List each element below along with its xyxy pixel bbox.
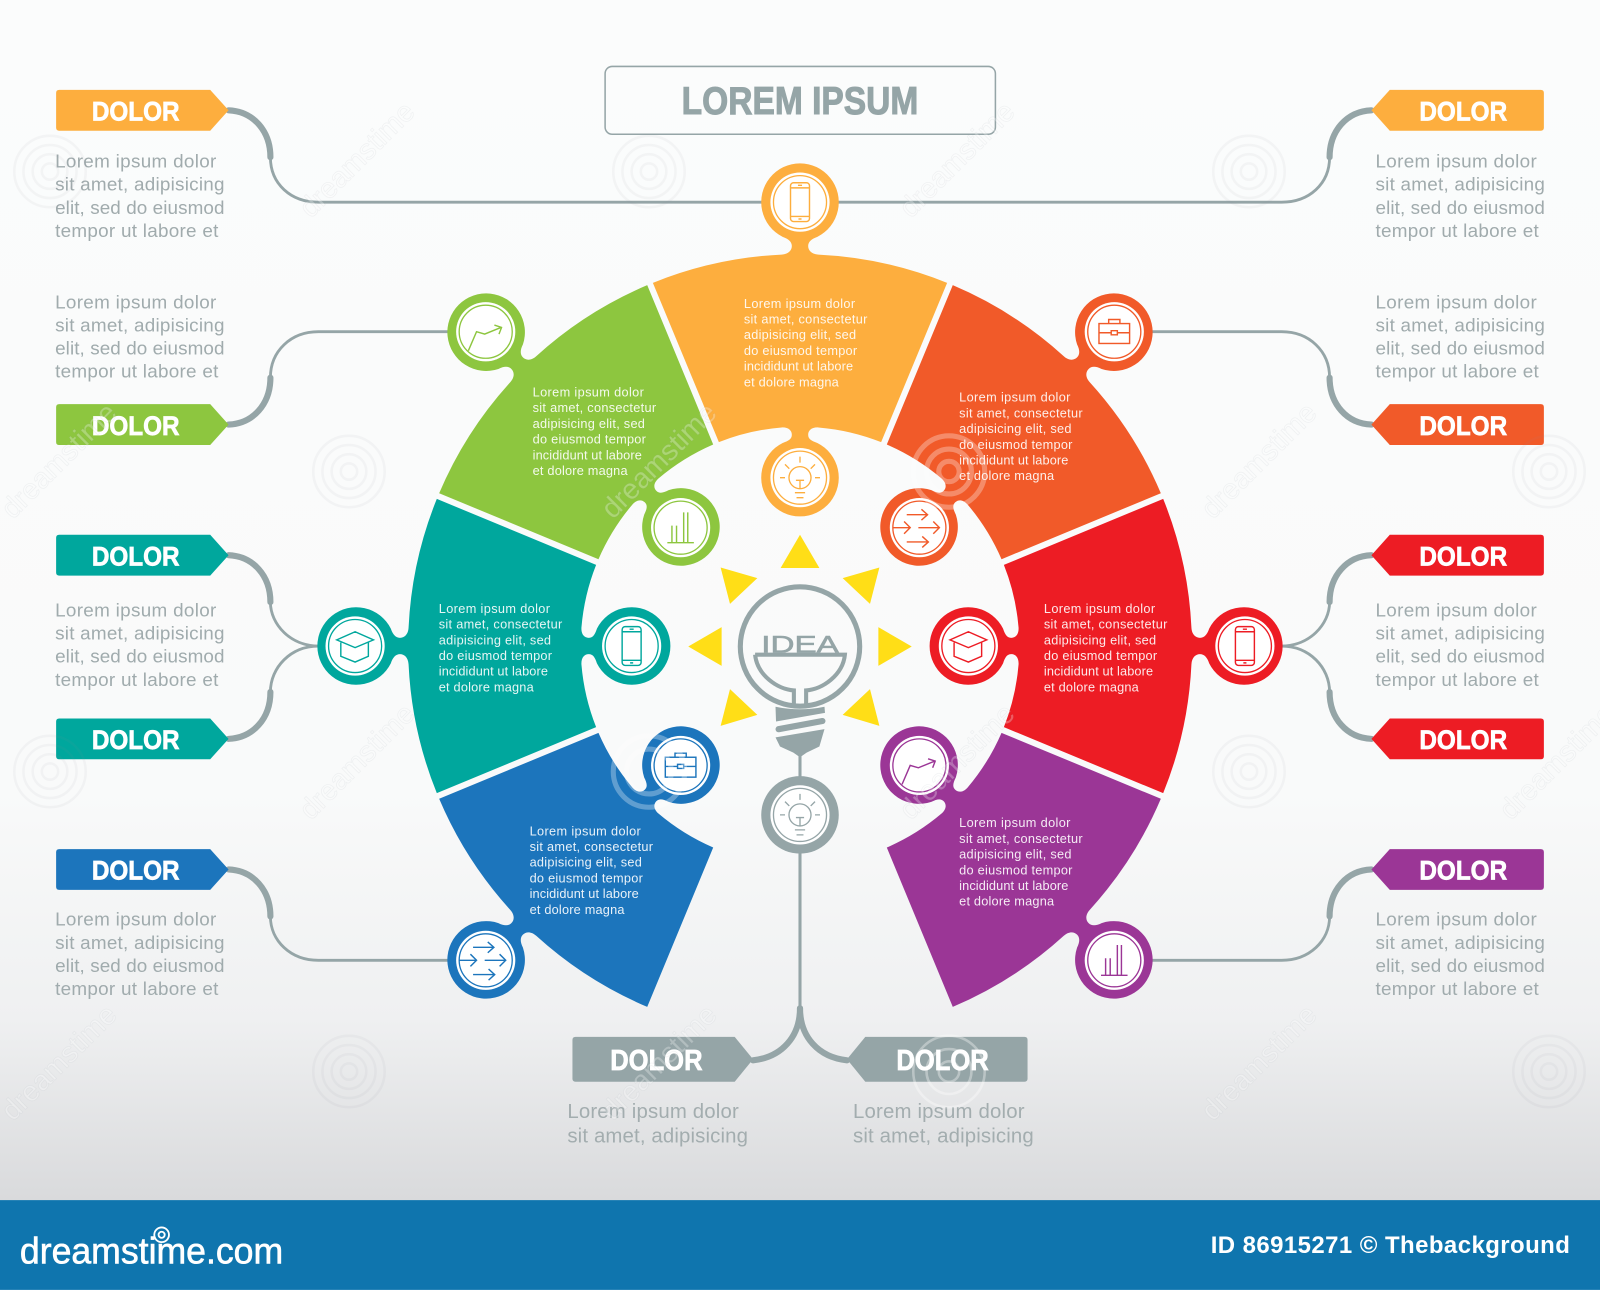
text: dark orange right: elit, sed do eiusmod [1376, 338, 1545, 359]
tag: blue left [56, 849, 229, 890]
segment text: et dolore magna [959, 468, 1055, 483]
segment text [533, 385, 657, 478]
inner icon: line chart [890, 736, 949, 795]
segment text [530, 823, 654, 917]
panel: teal segment [317, 499, 670, 793]
segment text: Lorem ipsum dolor [530, 823, 642, 838]
tag: orange right: DOLOR [1419, 97, 1507, 127]
grey bulb node [761, 776, 839, 854]
tag: orange right [1371, 90, 1544, 131]
inner icon: phone [602, 616, 661, 676]
watermark text: dreamstime [1195, 397, 1323, 525]
segment text: do eiusmod tempor [959, 437, 1073, 452]
watermark text: dreamstime [293, 96, 421, 224]
text: dark orange right [1376, 291, 1545, 382]
text: red right: elit, sed do eiusmod [1376, 646, 1545, 667]
segment text [439, 601, 563, 694]
segment text: incididunt ut labore [530, 886, 639, 901]
tag: green left [56, 404, 229, 445]
tag: dark orange right: DOLOR [1419, 411, 1507, 441]
tag: blue left: DOLOR [92, 856, 180, 886]
segment text: sit amet, consectetur [744, 311, 868, 326]
text: teal left: Lorem ipsum dolor [55, 599, 216, 620]
segment text: et dolore magna [959, 894, 1055, 909]
segment text: adipisicing elit, sed [959, 847, 1071, 862]
segment text: incididunt ut labore [533, 447, 642, 462]
screw base [776, 707, 825, 757]
yellow rays [688, 535, 912, 726]
footer banner [0, 1200, 1600, 1290]
text: orange right: tempor ut labore et [1376, 220, 1540, 241]
segment text: et dolore magna [533, 463, 628, 478]
tag: teal bottom: DOLOR [92, 725, 180, 755]
brand spiral [154, 1227, 169, 1242]
text: green left: Lorem ipsum dolor [55, 291, 216, 312]
segment text: Lorem ipsum dolor [744, 296, 856, 311]
watermark text: dreamstime [595, 999, 723, 1127]
outer icon: briefcase [1085, 302, 1144, 361]
watermark text: dreamstime [293, 698, 421, 826]
watermark text: dreamstime [893, 96, 1021, 224]
text: blue left [55, 909, 224, 999]
tag: green left: DOLOR [92, 411, 180, 441]
tag: purple right [1371, 849, 1544, 890]
segment text: sit amet, consectetur [439, 617, 563, 632]
text: red right: tempor ut labore et [1376, 669, 1540, 690]
panel: dark orange segment [788, 201, 1245, 658]
segment text: sit amet, consectetur [533, 400, 657, 415]
segment text: sit amet, consectetur [530, 839, 654, 854]
tag: grey bottom left: DOLOR [610, 1045, 703, 1077]
text: orange left: Lorem ipsum dolor [55, 150, 216, 171]
text: purple right [1376, 909, 1545, 999]
outer icon: arrows [456, 931, 515, 990]
image id credit: ID 86915271 © Thebackground [1211, 1232, 1570, 1259]
text: green left: elit, sed do eiusmod [55, 338, 224, 359]
inner icon: arrows [890, 498, 949, 557]
outer icon: phone [1215, 616, 1274, 676]
segment text [1044, 601, 1168, 694]
segment text: do eiusmod tempor [439, 648, 553, 663]
segment text: do eiusmod tempor [744, 343, 858, 358]
inner icon: bars [651, 498, 710, 557]
text: orange left: elit, sed do eiusmod [55, 197, 224, 218]
text: blue left: sit amet, adipisicing [55, 932, 224, 953]
tag: teal bottom [56, 718, 229, 759]
text: orange left [55, 150, 224, 241]
segment text: incididunt ut labore [959, 878, 1068, 893]
tag: red top [1371, 535, 1544, 576]
text: green left [55, 291, 224, 382]
text: red right: Lorem ipsum dolor [1376, 599, 1537, 620]
tag: red bottom [1371, 718, 1544, 759]
text: orange right: elit, sed do eiusmod [1376, 197, 1545, 218]
segment text [959, 390, 1083, 483]
bulb glass [740, 587, 860, 706]
segment text: do eiusmod tempor [533, 432, 647, 447]
segment text: adipisicing elit, sed [530, 855, 642, 870]
title box [605, 66, 995, 134]
brand wordmark: dreamstime.com [20, 1230, 283, 1271]
segment text: sit amet, consectetur [959, 831, 1083, 846]
tag: grey bottom left [572, 1037, 753, 1082]
segment text: Lorem ipsum dolor [439, 601, 551, 616]
inner icon: graduation cap [939, 616, 998, 676]
text: dark orange right: Lorem ipsum dolor [1376, 291, 1537, 312]
text: bottom left [567, 1101, 748, 1147]
text: teal left [55, 599, 224, 690]
segment text: Lorem ipsum dolor [959, 390, 1071, 405]
text: green left: tempor ut labore et [55, 361, 219, 382]
segment text [744, 296, 868, 389]
watermark spirals [14, 136, 1585, 1107]
text: orange right: Lorem ipsum dolor [1376, 150, 1537, 171]
text: dark orange right: tempor ut labore et [1376, 361, 1540, 382]
panel: red segment [930, 499, 1283, 793]
text: teal left: tempor ut labore et [55, 669, 219, 690]
filament bowl [755, 655, 845, 706]
panel: orange segment [653, 163, 947, 516]
text: red right [1376, 599, 1545, 690]
text: red right: sit amet, adipisicing [1376, 623, 1545, 644]
segment text: adipisicing elit, sed [533, 416, 645, 431]
watermark text: dreamstime [893, 698, 1021, 826]
text: blue left: tempor ut labore et [55, 978, 219, 999]
panel: blue segment [355, 634, 812, 1091]
text: purple right: Lorem ipsum dolor [1376, 909, 1537, 930]
idea word: IDEA [761, 632, 839, 659]
segment text [959, 815, 1083, 909]
tag: grey bottom right: DOLOR [896, 1045, 989, 1077]
text: purple right: tempor ut labore et [1376, 978, 1540, 999]
segment text: do eiusmod tempor [959, 862, 1073, 877]
segment text: et dolore magna [439, 679, 535, 694]
text: purple right: elit, sed do eiusmod [1376, 955, 1545, 976]
text: dark orange right: sit amet, adipisicing [1376, 314, 1545, 335]
text: teal left: elit, sed do eiusmod [55, 646, 224, 667]
tag: orange left [56, 90, 229, 131]
segment text: adipisicing elit, sed [439, 632, 551, 647]
icon: idea light bulb with rays [688, 535, 912, 757]
panel: purple segment [788, 634, 1245, 1091]
outer icon: graduation cap [326, 616, 385, 676]
segment text: do eiusmod tempor [530, 870, 644, 885]
watermark text: dreamstime [595, 397, 723, 525]
tag: grey bottom right [847, 1037, 1028, 1082]
text: orange right: sit amet, adipisicing [1376, 174, 1545, 195]
text: orange right [1376, 150, 1545, 241]
text: bottom right: Lorem ipsum dolor [853, 1101, 1025, 1123]
text: orange left: sit amet, adipisicing [55, 174, 224, 195]
tag: teal top [56, 535, 229, 576]
connector lines [229, 110, 1371, 1060]
inner icon: briefcase [651, 736, 710, 795]
inner icon: bulb [770, 448, 830, 507]
segment text: Lorem ipsum dolor [533, 385, 645, 400]
segment text: et dolore magna [530, 902, 625, 917]
panel: green segment [355, 201, 812, 658]
text: bottom left: Lorem ipsum dolor [567, 1101, 739, 1123]
segment text: Lorem ipsum dolor [1044, 601, 1156, 616]
text: blue left: elit, sed do eiusmod [55, 955, 224, 976]
segment text: Lorem ipsum dolor [959, 815, 1071, 830]
title box: LOREM IPSUM [682, 80, 918, 123]
segment text: sit amet, consectetur [1044, 617, 1168, 632]
segment text: incididunt ut labore [439, 664, 548, 679]
text: bottom left: sit amet, adipisicing [567, 1125, 748, 1147]
text: green left: sit amet, adipisicing [55, 314, 224, 335]
segment text: do eiusmod tempor [1044, 648, 1158, 663]
segment text: adipisicing elit, sed [959, 421, 1071, 436]
tag: purple right: DOLOR [1419, 856, 1507, 886]
text: bottom right: sit amet, adipisicing [853, 1125, 1034, 1147]
text: purple right: sit amet, adipisicing [1376, 932, 1545, 953]
tag: orange left: DOLOR [92, 97, 180, 127]
segment text: et dolore magna [744, 374, 840, 389]
segment text: incididunt ut labore [1044, 664, 1153, 679]
tag: red top: DOLOR [1419, 541, 1507, 571]
segment text: incididunt ut labore [744, 359, 853, 374]
segment text: adipisicing elit, sed [744, 327, 856, 342]
segment text: et dolore magna [1044, 679, 1140, 694]
tag: teal top: DOLOR [92, 541, 180, 571]
tag: red bottom: DOLOR [1419, 725, 1507, 755]
segment text: incididunt ut labore [959, 452, 1068, 467]
watermark text: dreamstime [1195, 999, 1323, 1127]
outer icon: line chart [456, 302, 515, 361]
segment text: adipisicing elit, sed [1044, 632, 1156, 647]
outer icon: phone [770, 173, 830, 232]
text: blue left: Lorem ipsum dolor [55, 909, 216, 930]
text: orange left: tempor ut labore et [55, 220, 219, 241]
tag: dark orange right [1371, 404, 1544, 445]
text: teal left: sit amet, adipisicing [55, 623, 224, 644]
watermark text [0, 96, 1600, 1127]
text: bottom right [853, 1101, 1034, 1147]
segment text: sit amet, consectetur [959, 405, 1083, 420]
outer icon: bars [1085, 931, 1144, 990]
